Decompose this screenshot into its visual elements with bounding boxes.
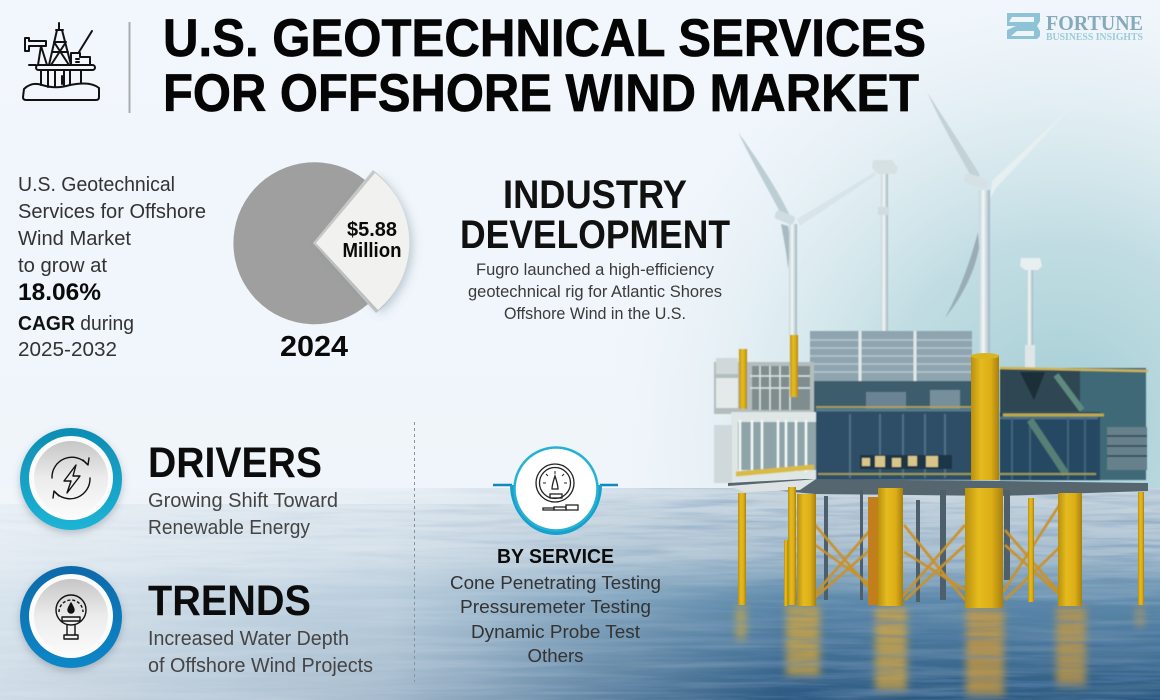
panel: drivers [20,428,338,539]
panel: industry development [460,173,730,323]
platform: deck underside [728,479,1148,496]
heading: trends: TRENDS [148,577,311,625]
heading: drivers: DRIVERS [148,439,322,487]
panel: by service [450,448,661,666]
description: geotechnical rig for Atlantic Shores [468,283,722,301]
pie: highlighted slice [313,170,409,313]
text block: market growth: 2025-2032 [18,338,117,361]
text block: market growth: Services for Offshore [18,200,206,223]
list: service types: Pressuremeter Testing [460,596,651,617]
pie: remainder [233,162,368,324]
text: driver description [148,490,338,539]
text block: market growth: CAGR during [18,312,134,335]
heading: by service: BY SERVICE [497,546,614,568]
heading [460,173,730,257]
chart: market size pie [233,162,409,363]
list: service types: Dynamic Probe Test [471,621,640,642]
logo: Fortune Business Insights [1007,11,1143,43]
logo mark [1007,13,1040,39]
pie: year label: 2024 [280,331,348,363]
text block: market growth: Wind Market [18,227,131,250]
icon: gauge badge [493,448,618,535]
platform: braces [808,498,1070,605]
heading: INDUSTRY [503,173,687,217]
text: trend description: Increased Water Depth [148,628,349,650]
platform: dark secondary legs [824,490,1010,602]
text block: market growth: 18.06% [18,279,101,306]
description: Fugro launched a high-efficiency [476,261,715,279]
platform: ripples over reflections [736,604,1144,699]
title [163,9,926,123]
icon: oil rig [23,23,99,100]
logo wordmark: BUSINESS INSIGHTS [1046,32,1143,43]
pie: highlighted slice: Million [342,240,402,262]
list: service types: Others [528,645,584,666]
background: sea [0,488,1160,700]
divider: dashed vertical [414,422,416,682]
icon: pressure gauge badge [20,566,122,668]
icon: energy cycle badge [20,428,122,530]
text: trend description [148,628,373,677]
list: service types [450,572,661,666]
text: trend description: of Offshore Wind Projects [148,655,373,677]
platform: yellow legs [738,353,1144,608]
platform: water reflections [736,606,1144,696]
text block: market growth: to grow at [18,254,107,277]
platform: lower deck windows [714,407,1147,483]
list: service types: Cone Penetrating Testing [450,572,661,593]
text block: market growth [18,173,206,361]
divider: header [128,22,130,113]
logo wordmark: FORTUNE [1046,11,1143,35]
pie: highlighted slice: $5.88 [347,219,397,241]
text block: market growth: U.S. Geotechnical [18,173,175,196]
panel: trends [20,566,373,677]
title: U.S. GEOTECHNICAL SERVICES [163,9,926,68]
text: driver description: Growing Shift Toward [148,490,338,512]
platform: upper modules [714,331,1148,480]
illustration: offshore platform [640,331,1160,700]
text: driver description: Renewable Energy [148,517,310,539]
description: Offshore Wind in the U.S. [504,305,686,323]
description [468,261,722,323]
title: FOR OFFSHORE WIND MARKET [163,64,919,123]
heading: DEVELOPMENT [460,213,730,257]
illustration: turbines [738,92,1082,371]
